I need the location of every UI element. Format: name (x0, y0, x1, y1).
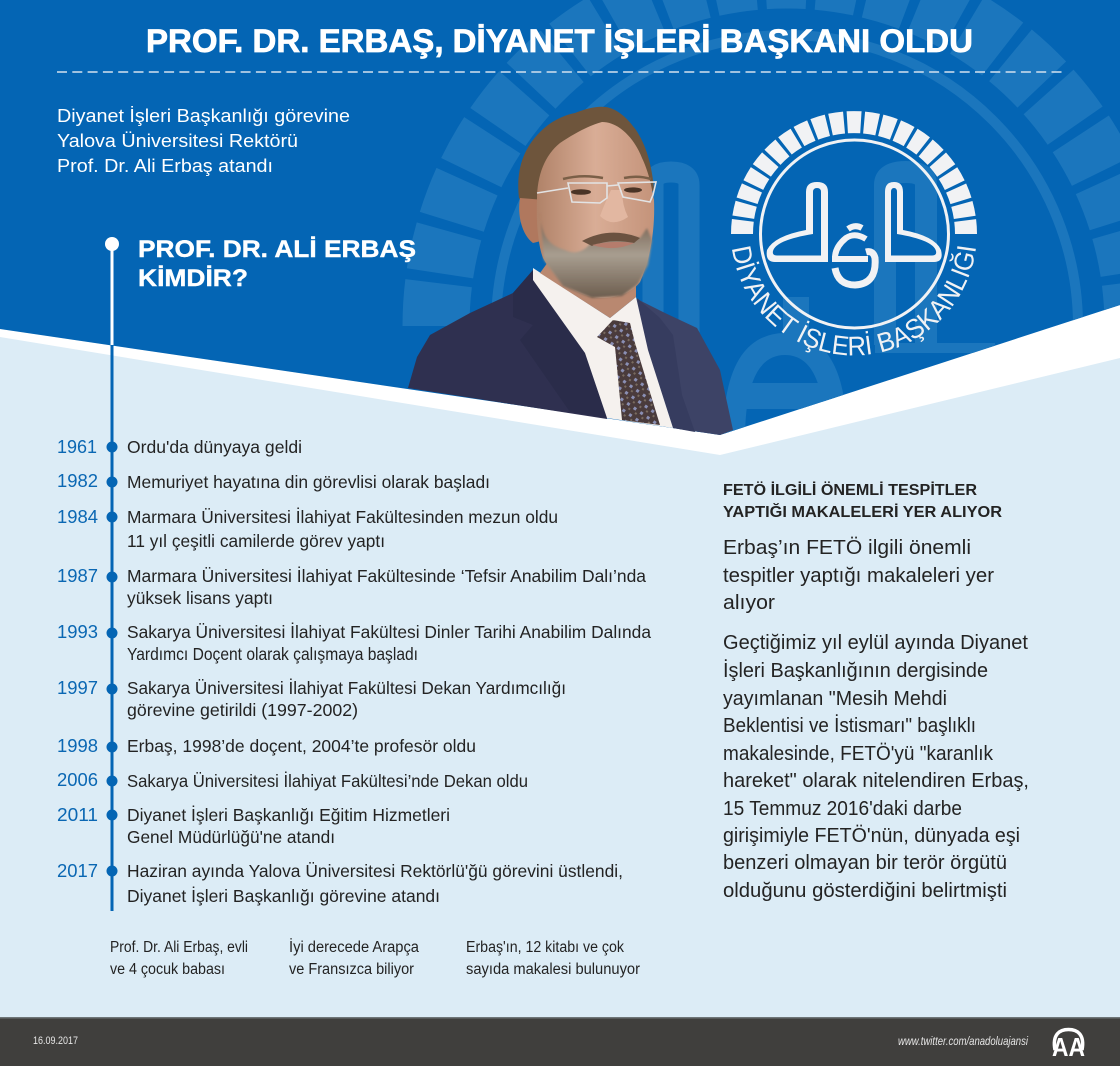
portrait eyebrows (563, 176, 651, 179)
portrait shirt (533, 268, 673, 428)
timeline years: 1961 (57, 437, 97, 457)
timeline years (57, 437, 98, 881)
timeline entries: Ordu'da dünyaya geldi (127, 437, 302, 457)
timeline years: 1997 (57, 678, 98, 698)
right column heading (723, 482, 1002, 521)
intro text: Diyanet İşleri Başkanlığı görevine (57, 105, 350, 126)
timeline (57, 237, 651, 911)
timeline dots (106, 442, 118, 876)
blue header panel (0, 0, 1120, 435)
portrait of Prof. Dr. Ali Erbaş (408, 107, 733, 435)
timeline blue stem (110, 345, 114, 911)
right column body paragraph: olduğunu gösterdiğini belirtmişti (723, 879, 1007, 902)
portrait left lapel (513, 270, 607, 418)
portrait ear (519, 198, 545, 243)
timeline entries: Sakarya Üniversitesi İlahiyat Fakültesi Dekan Yardımcılığı (127, 678, 566, 698)
intro text (57, 105, 350, 176)
footer bar (0, 1017, 1120, 1066)
portrait tie (597, 320, 660, 425)
timeline entries: Memuriyet hayatına din görevlisi olarak başladı (127, 472, 490, 492)
timeline entries: Yardımcı Doçent olarak çalışmaya başladı (127, 644, 418, 664)
right column body paragraph: hareket" olarak nitelendiren Erbaş, (723, 769, 1029, 792)
personal facts (110, 938, 640, 978)
timeline years: 2017 (57, 861, 98, 881)
fact: publications: Erbaş'ın, 12 kitabı ve çok (466, 939, 624, 956)
right column lead paragraph (723, 536, 994, 614)
emblem rays (742, 122, 966, 234)
portrait glasses (537, 182, 656, 203)
watermark calligraphy (653, 172, 995, 440)
timeline years: 1987 (57, 566, 98, 586)
portrait moustache and mouth (582, 233, 640, 246)
right column heading: YAPTIĞI MAKALELERİ YER ALIYOR (723, 503, 1002, 521)
footer date: 16.09.2017 (33, 1035, 78, 1047)
portrait suit left (408, 270, 607, 419)
fact: publications: sayıda makalesi bulunuyor (466, 961, 640, 978)
timeline entries: Genel Müdürlüğü'ne atandı (127, 827, 335, 847)
white chevron band (0, 305, 1120, 455)
right column heading: FETÖ İLGİLİ ÖNEMLİ TESPİTLER (723, 482, 977, 499)
portrait right lapel (637, 298, 695, 432)
watermark ring (492, 30, 1083, 404)
right column body paragraph: benzeri olmayan bir terör örgütü (723, 851, 1007, 874)
right column body paragraph: İşleri Başkanlığının dergisinde (723, 659, 988, 682)
watermark rays (436, 0, 1120, 326)
footer twitter link: www.twitter.com/anadoluajansi (898, 1034, 1028, 1048)
dashed title divider (57, 71, 1063, 73)
timeline years: 1982 (57, 471, 98, 491)
timeline entries: yüksek lisans yaptı (127, 588, 273, 608)
section heading: KİMDİR? (138, 265, 248, 292)
emblem: Diyanet logo: DİYANET İŞLERİ BAŞKANLIĞI (732, 246, 976, 356)
portrait suit right (633, 297, 733, 435)
timeline entries: Sakarya Üniversitesi İlahiyat Fakültesi’nde Dekan oldu (127, 771, 528, 791)
timeline entries: Diyanet İşleri Başkanlığı Eğitim Hizmetleri (127, 805, 450, 825)
icon: Anadolu Agency logo: AA (1052, 1032, 1085, 1062)
emblem calligraphy (767, 182, 942, 285)
timeline years: 1984 (57, 507, 98, 527)
portrait neck (540, 262, 636, 318)
emblem: Diyanet logo (731, 111, 977, 356)
timeline white stem and dot (105, 237, 119, 346)
timeline years: 1993 (57, 622, 98, 642)
right column body paragraph: 15 Temmuz 2016'daki darbe (723, 797, 962, 820)
timeline entries: Sakarya Üniversitesi İlahiyat Fakültesi Dinler Tarihi Anabilim Dalında (127, 622, 651, 642)
emblem ring (760, 140, 948, 328)
fact: family (110, 939, 248, 978)
fact: languages (289, 938, 419, 978)
emblem lettering (732, 248, 976, 355)
section heading (138, 236, 416, 292)
section heading: PROF. DR. ALİ ERBAŞ (138, 236, 416, 263)
fact: publications (466, 939, 640, 978)
right column body paragraph: Beklentisi ve İstismarı" başlıklı (723, 714, 976, 737)
fact: languages: İyi derecede Arapça (289, 938, 419, 956)
timeline entries: görevine getirildi (1997-2002) (127, 700, 358, 720)
fact: family: ve 4 çocuk babası (110, 961, 225, 978)
right column body paragraph: makalesinde, FETÖ'yü "karanlık (723, 742, 994, 765)
timeline entries: Haziran ayında Yalova Üniversitesi Rektörlü'ğü görevini üstlendi, (127, 861, 623, 881)
right column body paragraph: girişimiyle FETÖ'nün, dünyada eşi (723, 824, 1020, 847)
right column lead paragraph: tespitler yaptığı makaleleri yer (723, 564, 994, 587)
timeline years: 1998 (57, 736, 98, 756)
fact: languages: ve Fransızca biliyor (289, 961, 414, 978)
timeline entries: 11 yıl çeşitli camilerde görev yaptı (127, 531, 385, 551)
portrait hair (518, 107, 654, 210)
portrait nose (600, 190, 628, 222)
portrait eyes (571, 187, 642, 195)
portrait face (537, 122, 654, 298)
timeline entries (127, 437, 651, 906)
background watermark emblem (402, 0, 1120, 434)
portrait beard (540, 212, 652, 298)
right column lead paragraph: Erbaş’ın FETÖ ilgili önemli (723, 536, 971, 559)
right column body paragraph: yayımlanan "Mesih Mehdi (723, 687, 947, 710)
right column body paragraph: Geçtiğimiz yıl eylül ayında Diyanet (723, 631, 1028, 654)
timeline entries: Marmara Üniversitesi İlahiyat Fakültesinden mezun oldu (127, 507, 558, 527)
timeline entries: Marmara Üniversitesi İlahiyat Fakültesinde ‘Tefsir Anabilim Dalı’nda (127, 566, 646, 586)
timeline years: 2011 (57, 805, 98, 825)
right column lead paragraph: alıyor (723, 591, 775, 614)
timeline entries: Erbaş, 1998’de doçent, 2004’te profesör oldu (127, 736, 476, 756)
fact: family: Prof. Dr. Ali Erbaş, evli (110, 939, 248, 956)
timeline entries: Diyanet İşleri Başkanlığı görevine atandı (127, 886, 440, 906)
intro text: Prof. Dr. Ali Erbaş atandı (57, 155, 273, 176)
intro text: Yalova Üniversitesi Rektörü (57, 130, 298, 151)
title: PROF. DR. ERBAŞ, DİYANET İŞLERİ BAŞKANI OLDU (146, 23, 973, 59)
right column body paragraph (723, 631, 1029, 902)
timeline years: 2006 (57, 770, 98, 790)
